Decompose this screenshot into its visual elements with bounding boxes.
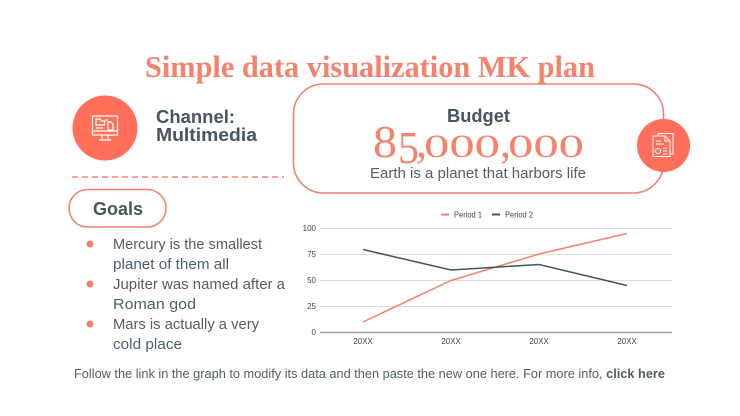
goals list: planet of them all [113,257,229,273]
x axis labels: 20XX [441,337,461,346]
channel label [156,107,258,145]
x axis labels: 20XX [353,337,373,346]
budget value: , [500,118,511,167]
budget value: 000 [508,129,584,165]
y axis labels: 75 [307,250,317,259]
series: period 1 [363,234,627,322]
goals list [86,237,286,353]
series: period 2 [363,250,627,286]
footer note: Follow the link in the graph to modify its data and then paste the new one here. For more info, click here [74,367,665,381]
icon: budget document [637,119,690,172]
dashed divider [72,176,284,178]
x axis labels: 20XX [529,337,549,346]
budget value: , [416,118,427,167]
goals pill [69,190,166,227]
y axis labels: 100 [303,224,317,233]
y axis labels: 50 [307,276,317,285]
budget heading: Budget [447,106,510,126]
panel: budget [294,84,664,193]
budget value: 000 [424,129,500,165]
y axis labels: 25 [307,302,317,311]
budget value: 8 [373,117,397,167]
chart legend [441,210,534,220]
goals list: Mercury is the smallest [113,237,262,253]
x axis labels: 20XX [617,337,637,346]
chart legend: Period 2 [505,210,534,220]
goals list: Mars is actually a very [113,317,260,333]
channel label: Multimedia [156,125,258,145]
line chart [303,210,672,346]
budget value: 5 [398,123,419,173]
goals pill: Goals [93,199,143,219]
chart legend: Period 1 [454,210,483,220]
y axis labels: 0 [312,328,317,337]
x axis labels [353,337,637,346]
budget caption: Earth is a planet that harbors life [370,166,586,182]
goals list: cold place [113,337,182,353]
goals list: Roman god [113,297,196,313]
y axis labels [303,224,317,337]
icon: multimedia monitor [72,96,138,160]
title: Simple data visualization MK plan [145,49,595,84]
goals list: Jupiter was named after a [113,277,286,293]
channel label: Channel: [156,107,235,127]
